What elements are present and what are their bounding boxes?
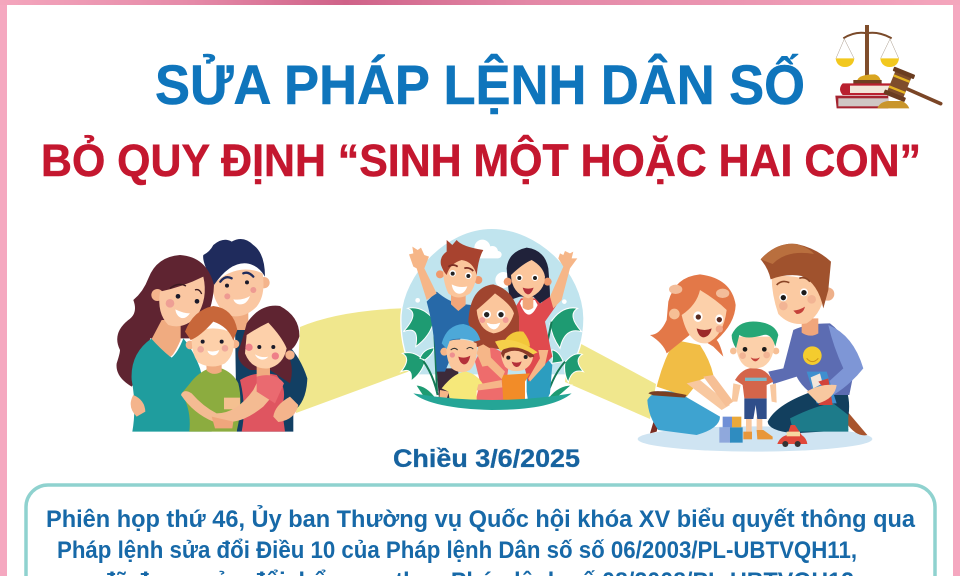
boy in blue hair	[439, 324, 502, 402]
right palms	[548, 308, 583, 398]
arms	[181, 376, 283, 422]
woman head	[151, 277, 205, 357]
icon: scales of justice and gavel	[835, 25, 941, 108]
left palms	[401, 308, 437, 399]
title: SỬA PHÁP LỆNH DÂN SỐ	[155, 53, 805, 116]
floor ellipse	[638, 426, 872, 452]
panel text: Phiên họp thứ 46, Ủy ban Thường vụ Quốc hội khóa XV biểu quyết thông qua	[46, 504, 916, 533]
child	[730, 321, 779, 439]
father	[761, 244, 867, 435]
girl	[238, 306, 299, 432]
ground arc	[413, 393, 572, 410]
date label: Chiều 3/6/2025	[393, 445, 580, 473]
man head	[203, 239, 270, 330]
woman hair	[117, 255, 214, 387]
sky background	[401, 228, 584, 375]
toy blocks	[719, 417, 743, 443]
illustration: family outdoors with palms	[401, 228, 584, 410]
subtitle: BỎ QUY ĐỊNH “SINH MỘT HOẶC HAI CON”	[41, 135, 921, 186]
panel text	[46, 504, 916, 576]
boy	[182, 306, 240, 432]
man body	[235, 323, 307, 432]
info panel	[26, 485, 935, 576]
illustration: hugging family	[117, 239, 307, 432]
mother in black hair	[504, 248, 577, 403]
boy in yellow hat	[478, 331, 548, 402]
father	[409, 240, 483, 400]
mother	[647, 274, 736, 435]
yellow connector right	[565, 338, 656, 419]
clouds	[415, 240, 567, 304]
yellow connector left	[296, 308, 410, 413]
mother in pink	[468, 284, 519, 403]
panel text: Pháp lệnh sửa đổi Điều 10 của Pháp lệnh Dân số số 06/2003/PL-UBTVQH11,	[57, 537, 857, 564]
illustration: parents playing with child	[638, 244, 872, 452]
woman body	[132, 338, 213, 432]
toy car	[777, 425, 807, 447]
